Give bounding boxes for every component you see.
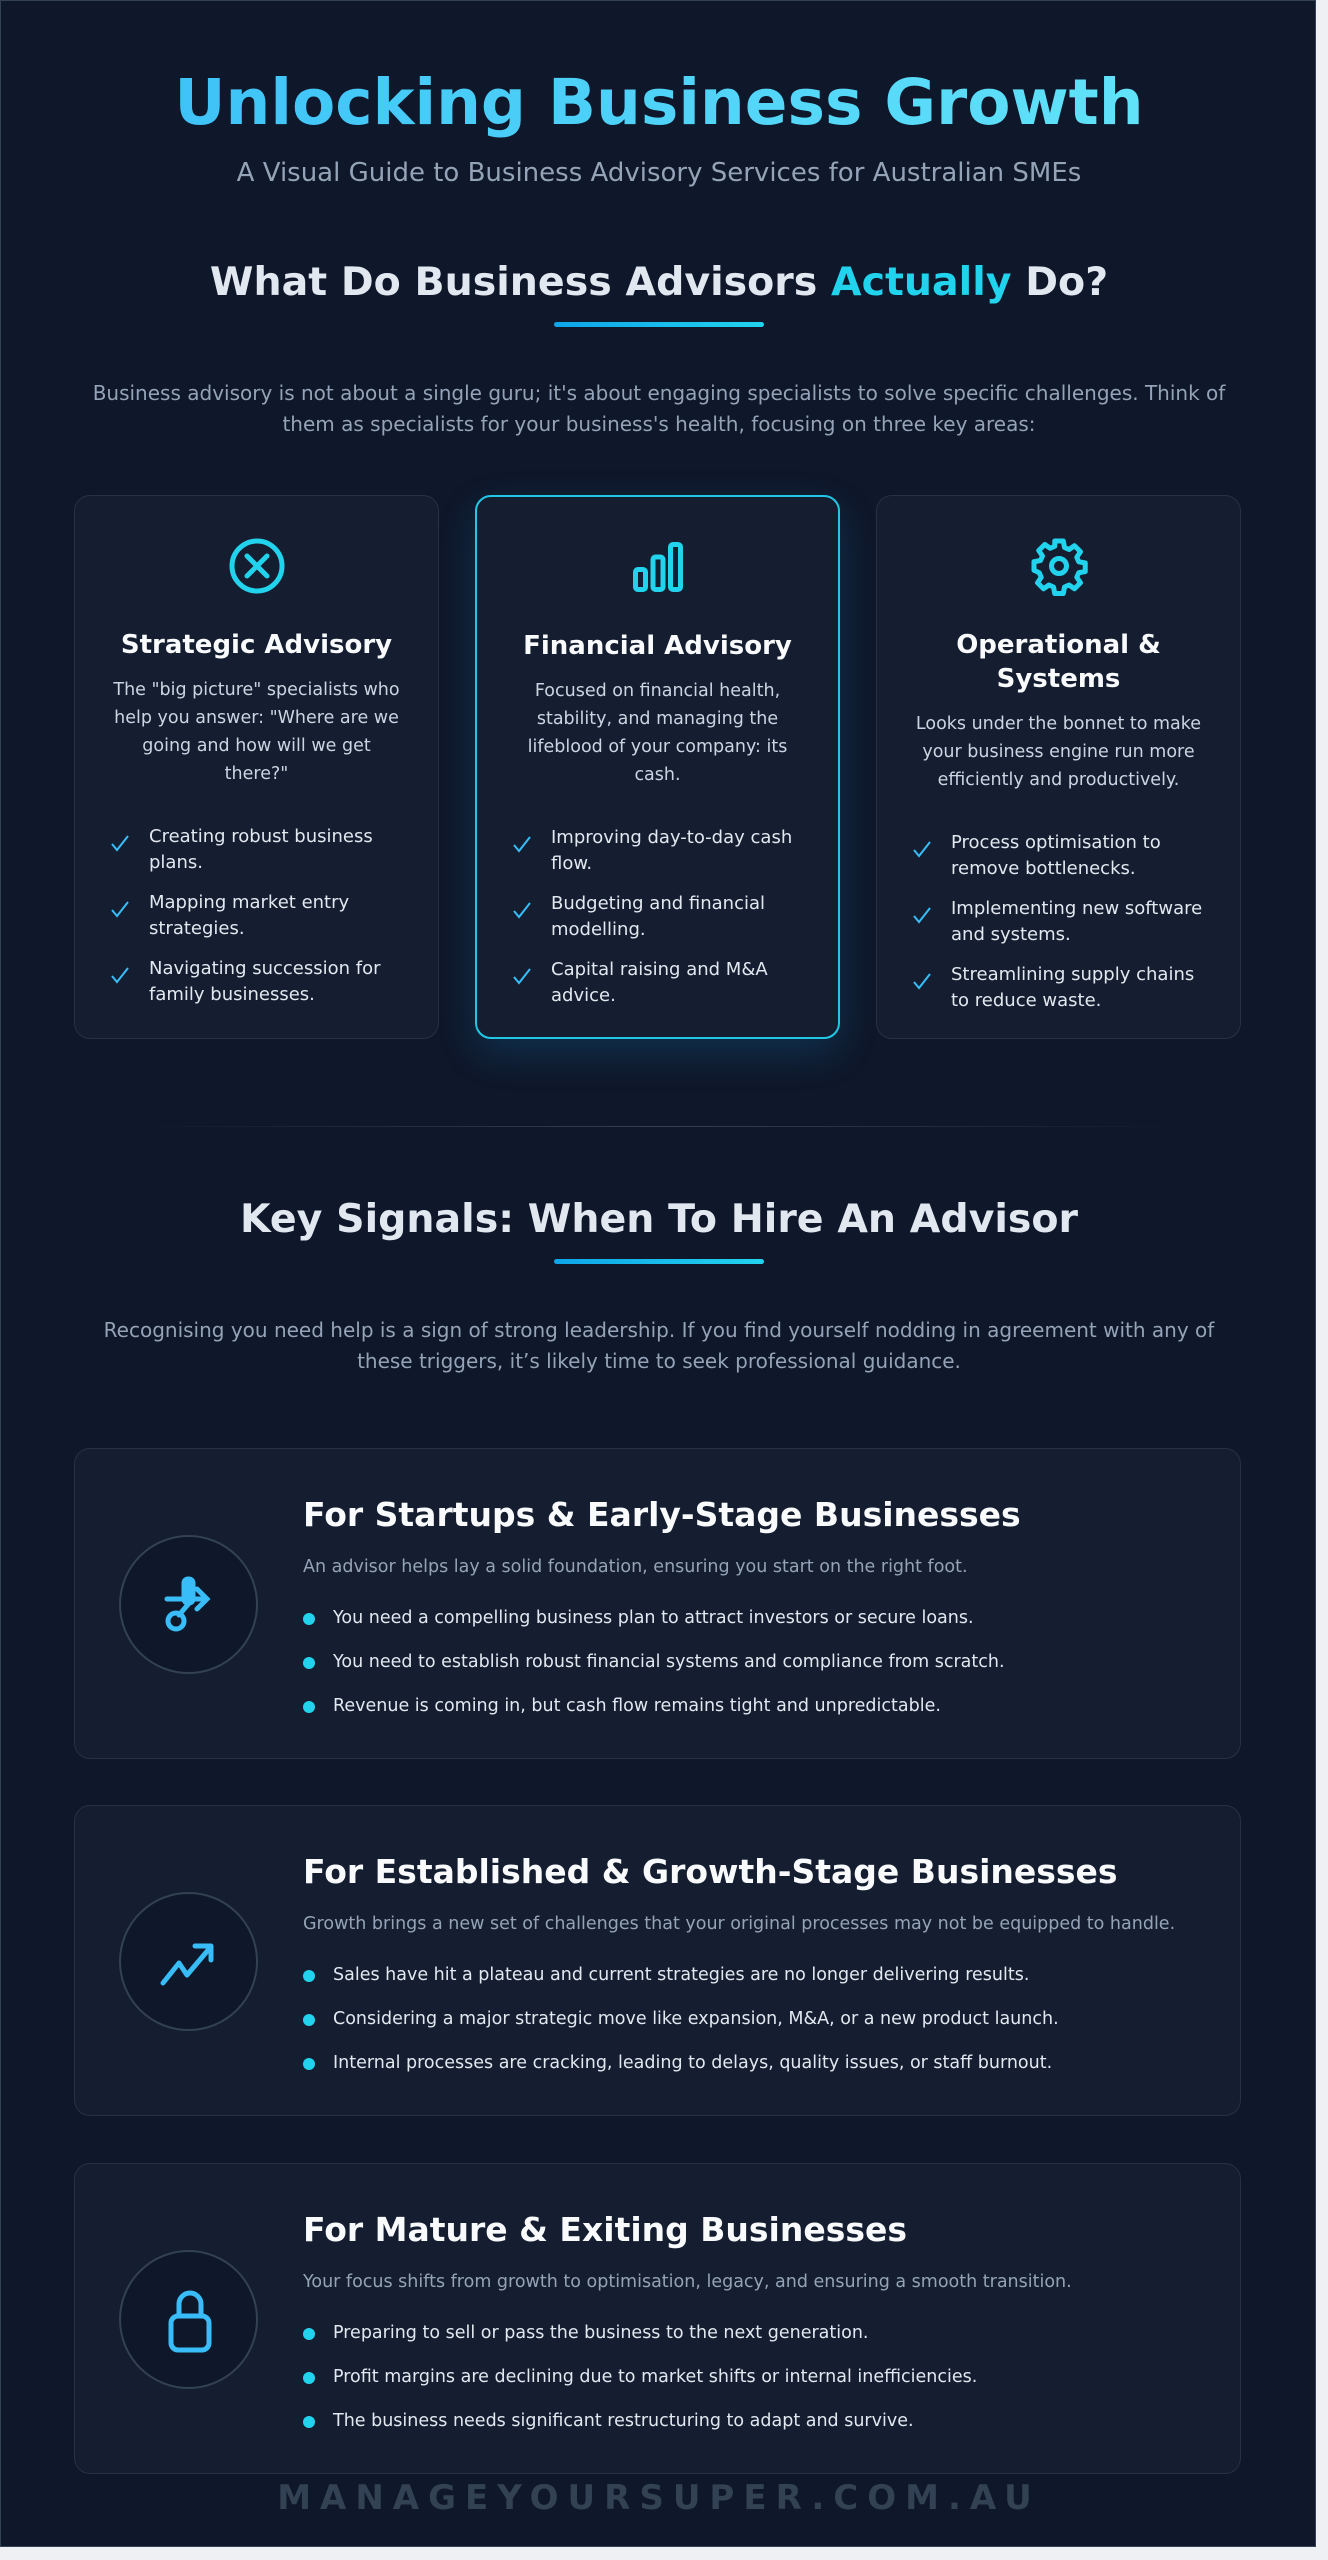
panel: strategic advisory: Mapping market entry strategies.	[149, 892, 349, 939]
panel: established: Internal processes are cracking, leading to delays, quality issues, or staff burnout.	[333, 2053, 1052, 2073]
heading: what advisors do: What Do Business Advisors Actually Do?	[210, 259, 1108, 305]
intro text: Business advisory is not about a single guru; it's about engaging specialists to solve specific challenges. Think of them as specialists for your business's health, focusing on three key areas:	[93, 381, 1225, 436]
panel: mature: For Mature & Exiting Businesses	[303, 2210, 907, 2249]
panel: mature	[74, 2163, 1241, 2474]
icon: trend up	[119, 1892, 258, 2031]
panel: mature: Your focus shifts from growth to optimisation, legacy, and ensuring a smooth transition.	[303, 2272, 1072, 2292]
panel: startups	[74, 1448, 1241, 1759]
panel: established: Considering a major strategic move like expansion, M&A, or a new product launch.	[333, 2009, 1059, 2029]
panel: financial advisory: Capital raising and M&A advice.	[551, 959, 768, 1006]
intro text: signals: Recognising you need help is a sign of strong leadership. If you find yourself nodding in agreement with any of these triggers, it’s likely time to seek professional guidance.	[104, 1318, 1214, 1373]
footer: MANAGEYOURSUPER.COM.AU	[277, 2478, 1041, 2518]
panel: strategic advisory: Creating robust business plans.	[149, 826, 373, 873]
panel: startups: You need a compelling business plan to attract investors or secure loans.	[333, 1608, 974, 1628]
panel: mature: Profit margins are declining due to market shifts or internal inefficiencies.	[333, 2367, 977, 2387]
panel: strategic advisory: The "big picture" specialists who help you answer: "Where are we going and how will we get there?"	[113, 680, 400, 784]
panel: financial advisory	[475, 495, 840, 1039]
panel: operational: Process optimisation to remove bottlenecks.	[951, 832, 1161, 879]
panel: financial advisory: Improving day-to-day cash flow.	[551, 827, 792, 874]
panel: strategic advisory	[74, 495, 439, 1039]
panel: established	[74, 1805, 1241, 2116]
icon: circle x	[230, 538, 284, 594]
heading: key signals: Key Signals: When To Hire An Advisor	[240, 1196, 1078, 1242]
panel: startups: Revenue is coming in, but cash flow remains tight and unpredictable.	[333, 1696, 941, 1716]
icon: bar chart	[633, 542, 683, 592]
icon: gear	[1032, 538, 1088, 596]
panel: startups: An advisor helps lay a solid foundation, ensuring you start on the right foot.	[303, 1557, 968, 1577]
panel: strategic advisory: Navigating succession for family businesses.	[149, 958, 381, 1005]
panel: established: Sales have hit a plateau and current strategies are no longer delivering results.	[333, 1965, 1029, 1985]
panel: strategic advisory: Strategic Advisory	[121, 630, 392, 660]
panel: established: Growth brings a new set of challenges that your original processes may not be equipped to handle.	[303, 1914, 1175, 1934]
panel: operational	[876, 495, 1241, 1039]
panel: startups: For Startups & Early-Stage Businesses	[303, 1495, 1021, 1534]
panel: financial advisory: Budgeting and financial modelling.	[551, 893, 765, 940]
panel: startups: You need to establish robust financial systems and compliance from scratch.	[333, 1652, 1005, 1672]
panel: operational: Looks under the bonnet to make your business engine run more efficiently and productively.	[916, 714, 1201, 790]
panel: mature: The business needs significant restructuring to adapt and survive.	[333, 2411, 914, 2431]
title: Unlocking Business Growth	[174, 66, 1144, 139]
icon: lock	[119, 2250, 258, 2389]
panel: operational: Operational & Systems	[956, 630, 1161, 694]
title	[1, 63, 1317, 143]
panel: financial advisory: Focused on financial health, stability, and managing the lifeblood of your company: its cash.	[528, 681, 787, 785]
icon: rocket	[119, 1535, 258, 1674]
panel: operational: Implementing new software and systems.	[951, 898, 1202, 945]
panel: established: For Established & Growth-Stage Businesses	[303, 1852, 1118, 1891]
panel: operational: Streamlining supply chains to reduce waste.	[951, 964, 1194, 1011]
subtitle: A Visual Guide to Business Advisory Services for Australian SMEs	[237, 158, 1081, 188]
panel: mature: Preparing to sell or pass the business to the next generation.	[333, 2323, 868, 2343]
panel: financial advisory: Financial Advisory	[523, 631, 792, 661]
